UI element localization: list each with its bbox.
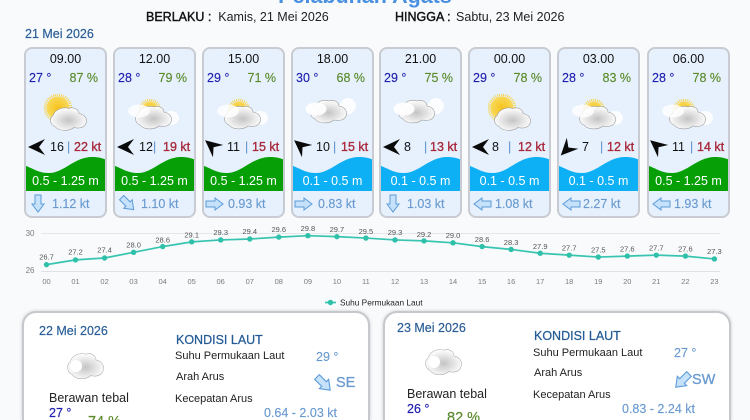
data labels: 29.0 bbox=[446, 231, 460, 240]
temperature: 29 ° bbox=[207, 71, 229, 85]
icon: current arrow bbox=[473, 197, 492, 211]
wave height: 0.1 - 0.5 m bbox=[391, 174, 450, 188]
heading: sea condition: KONDISI LAUT bbox=[534, 329, 621, 343]
legend: Suhu Permukaan Laut bbox=[340, 298, 423, 308]
icon: cloud bbox=[67, 353, 104, 379]
wind speed: 10 bbox=[316, 140, 330, 154]
label: current direction: Arah Arus bbox=[176, 371, 224, 383]
icon: sun and clouds bbox=[217, 98, 268, 130]
x axis labels: 01 bbox=[71, 277, 80, 286]
x axis labels: 18 bbox=[565, 277, 573, 286]
wave height: 0.5 - 1.25 m bbox=[210, 174, 277, 188]
data labels: 29.7 bbox=[330, 225, 344, 234]
value: surface temperature: 29 ° bbox=[316, 350, 338, 364]
data labels: 29.3 bbox=[213, 228, 228, 237]
date heading: 21 Mei 2026 bbox=[25, 27, 94, 41]
humidity: 78 % bbox=[514, 71, 542, 85]
icon: current arrow bbox=[206, 197, 224, 211]
separator: | bbox=[508, 140, 511, 154]
separator: | bbox=[153, 140, 156, 154]
icon: current arrow SE bbox=[314, 374, 331, 391]
data labels: 27.5 bbox=[591, 246, 606, 254]
icon: cloud bbox=[425, 349, 462, 375]
data labels: 27.6 bbox=[678, 244, 693, 254]
panel: forecast 22 Mei 2026 bbox=[22, 311, 370, 420]
label: current direction: Arah Arus bbox=[534, 367, 582, 379]
separator: | bbox=[333, 140, 336, 154]
time: 21.00 bbox=[405, 52, 436, 66]
x axis labels: 04 bbox=[159, 277, 167, 286]
wind gust: 22 kt bbox=[74, 140, 101, 154]
validity: until: HINGGA : Sabtu, 23 Mei 2026 bbox=[395, 10, 564, 24]
wind speed: 12 bbox=[139, 140, 153, 154]
icon: current arrow bbox=[118, 194, 134, 210]
time: 15.00 bbox=[228, 52, 259, 66]
forecast card 09.00 bbox=[24, 47, 107, 218]
current speed: 1.08 kt bbox=[495, 197, 533, 211]
wave height: 0.1 - 0.5 m bbox=[480, 174, 539, 188]
x axis labels: 02 bbox=[100, 277, 109, 286]
icon: current arrow bbox=[652, 197, 670, 211]
weather description: Berawan tebal bbox=[49, 391, 129, 405]
x axis labels: 07 bbox=[246, 277, 254, 286]
wave height band bbox=[204, 157, 283, 191]
wind gust: 12 kt bbox=[607, 140, 634, 154]
date: 22 Mei 2026 bbox=[39, 324, 108, 338]
separator: | bbox=[690, 140, 693, 154]
data labels: 29.6 bbox=[271, 225, 286, 234]
x axis labels: 16 bbox=[507, 277, 515, 286]
icon: wind arrow bbox=[560, 138, 578, 156]
date: 23 Mei 2026 bbox=[397, 321, 466, 335]
wave height band bbox=[293, 157, 372, 191]
wave height: 0.1 - 0.5 m bbox=[569, 174, 628, 188]
value: surface temperature: 27 ° bbox=[674, 346, 696, 360]
current speed: 1.03 kt bbox=[407, 197, 445, 211]
data labels: 27.7 bbox=[649, 244, 664, 252]
wave height: 0.1 - 0.5 m bbox=[303, 174, 362, 188]
temperature: 29 ° bbox=[473, 71, 495, 85]
icon: clouds bbox=[394, 98, 444, 124]
value: current direction: SE bbox=[336, 375, 355, 391]
wind gust: 14 kt bbox=[697, 140, 724, 154]
x axis labels: 08 bbox=[275, 277, 283, 286]
x axis labels: 13 bbox=[420, 277, 428, 286]
wind gust: 15 kt bbox=[252, 140, 279, 154]
current speed: 1.10 kt bbox=[141, 197, 179, 211]
forecast card 15.00 bbox=[202, 47, 285, 218]
icon: wind arrow bbox=[117, 139, 134, 155]
temperature: 27 ° bbox=[49, 406, 71, 420]
icon: sun and clouds bbox=[128, 98, 179, 130]
forecast card 12.00 bbox=[113, 47, 196, 218]
y axis labels: 26 bbox=[26, 266, 35, 275]
icon: current arrow bbox=[386, 194, 400, 213]
humidity: 71 % bbox=[248, 71, 276, 85]
validity: from: BERLAKU : Kamis, 21 Mei 2026 bbox=[146, 10, 329, 24]
data points bbox=[44, 233, 717, 267]
data labels: 29.5 bbox=[359, 227, 373, 236]
x axis labels: 14 bbox=[449, 277, 457, 286]
icon: wind arrow bbox=[472, 139, 489, 155]
forecast card 00.00 bbox=[468, 47, 551, 218]
current speed: 1.93 kt bbox=[674, 197, 712, 211]
x axis labels: 10 bbox=[333, 277, 341, 286]
icon: sun and clouds bbox=[572, 98, 623, 130]
data labels: 28.3 bbox=[504, 238, 518, 247]
data labels: 28.0 bbox=[126, 240, 141, 250]
data labels: 27.7 bbox=[562, 244, 577, 252]
temperature: 28 ° bbox=[652, 71, 674, 85]
icon: wind arrow bbox=[650, 140, 668, 158]
icon: current arrow SW bbox=[675, 370, 692, 388]
current speed: 0.93 kt bbox=[228, 197, 266, 211]
data labels: 27.3 bbox=[707, 247, 722, 256]
x axis labels: 20 bbox=[623, 277, 631, 286]
x axis labels: 11 bbox=[362, 277, 370, 286]
wind speed: 8 bbox=[404, 140, 411, 154]
temperature: 28 ° bbox=[562, 71, 584, 85]
x axis labels: 22 bbox=[681, 277, 690, 286]
wave height band bbox=[26, 157, 105, 191]
x axis labels: 21 bbox=[652, 277, 660, 286]
x axis labels: 03 bbox=[129, 277, 138, 286]
icon: sun and clouds bbox=[662, 98, 713, 130]
wave height: 0.5 - 1.25 m bbox=[121, 174, 188, 188]
data labels: 26.7 bbox=[39, 252, 54, 262]
time: 06.00 bbox=[673, 52, 704, 66]
wind gust: 19 kt bbox=[163, 140, 190, 154]
x axis labels: 23 bbox=[710, 277, 719, 286]
x axis labels: 12 bbox=[391, 277, 399, 286]
separator: | bbox=[245, 140, 248, 154]
y axis labels: 30 bbox=[26, 229, 35, 238]
x axis labels: 15 bbox=[478, 277, 486, 286]
time: 12.00 bbox=[139, 52, 170, 66]
wave height band bbox=[649, 157, 728, 191]
wind gust: 13 kt bbox=[430, 140, 457, 154]
data labels: 27.9 bbox=[533, 242, 548, 251]
wind speed: 7 bbox=[582, 140, 589, 154]
temperature: 26 ° bbox=[407, 402, 429, 416]
separator: | bbox=[424, 140, 427, 154]
wave height: 0.5 - 1.25 m bbox=[655, 174, 722, 188]
line chart: sea surface temperature bbox=[26, 225, 722, 308]
data labels: 29.1 bbox=[184, 230, 199, 240]
value: current speed: 0.64 - 2.03 kt bbox=[264, 406, 337, 420]
temperature line bbox=[46, 236, 714, 265]
humidity: 78 % bbox=[692, 71, 721, 85]
value: current direction: SW bbox=[692, 372, 715, 388]
humidity: 87 % bbox=[70, 71, 98, 85]
wind speed: 8 bbox=[492, 140, 499, 154]
label: surface temperature: Suhu Permukaan Laut bbox=[175, 350, 284, 362]
wave height band bbox=[381, 157, 460, 191]
temperature: 29 ° bbox=[384, 71, 406, 85]
x axis labels bbox=[42, 277, 719, 286]
data labels: 29.2 bbox=[417, 230, 431, 239]
temperature: 27 ° bbox=[29, 71, 51, 85]
icon: wind arrow bbox=[205, 140, 224, 158]
temperature: 30 ° bbox=[296, 71, 318, 85]
x axis labels: 17 bbox=[536, 277, 544, 286]
wind gust: 12 kt bbox=[518, 140, 545, 154]
wind speed: 11 bbox=[672, 140, 685, 154]
label: current speed: Kecepatan Arus bbox=[533, 389, 611, 401]
icon: current arrow bbox=[31, 194, 45, 213]
current speed: 2.27 kt bbox=[583, 197, 621, 211]
icon: current arrow bbox=[562, 197, 580, 211]
icon: sun and cloud bbox=[44, 94, 87, 131]
x axis labels: 19 bbox=[594, 277, 602, 286]
label: current speed: Kecepatan Arus bbox=[175, 393, 253, 405]
panel: forecast 23 Mei 2026 bbox=[383, 311, 731, 420]
icon: clouds bbox=[306, 98, 356, 124]
wind speed: 11 bbox=[227, 140, 240, 154]
data labels: 28.6 bbox=[155, 236, 170, 244]
current speed: 1.12 kt bbox=[52, 197, 90, 211]
humidity: 68 % bbox=[336, 71, 365, 85]
temperature: 28 ° bbox=[118, 71, 140, 85]
data labels: 29.3 bbox=[388, 228, 402, 237]
forecast card 03.00 bbox=[557, 47, 640, 218]
icon: wind arrow bbox=[28, 139, 45, 155]
wave height band bbox=[115, 157, 194, 191]
data labels: 28.6 bbox=[475, 235, 489, 244]
wind speed: 16 bbox=[50, 140, 64, 154]
icon: current arrow bbox=[294, 197, 313, 211]
label: surface temperature: Suhu Permukaan Laut bbox=[533, 347, 642, 359]
separator: | bbox=[67, 140, 70, 154]
data labels: 27.6 bbox=[620, 244, 635, 254]
x axis labels: 06 bbox=[217, 277, 225, 286]
humidity: 83 % bbox=[602, 71, 631, 85]
data labels bbox=[39, 224, 722, 262]
x axis labels: 05 bbox=[188, 277, 196, 286]
data labels: 27.4 bbox=[97, 246, 112, 254]
forecast card 21.00 bbox=[379, 47, 462, 218]
wave height band bbox=[559, 157, 638, 191]
icon: wind arrow bbox=[383, 139, 400, 155]
separator: | bbox=[600, 140, 603, 154]
time: 09.00 bbox=[50, 52, 81, 66]
time: 03.00 bbox=[583, 52, 614, 66]
wave height: 0.5 - 1.25 m bbox=[32, 174, 99, 188]
x axis labels: 00 bbox=[42, 277, 51, 286]
data labels: 29.4 bbox=[242, 227, 257, 236]
icon: sun and cloud bbox=[488, 94, 531, 131]
time: 00.00 bbox=[494, 52, 525, 66]
weather description: Berawan tebal bbox=[407, 387, 487, 401]
forecast card 06.00 bbox=[647, 47, 730, 218]
wave height band bbox=[470, 157, 549, 191]
y axis labels bbox=[26, 229, 35, 275]
icon: wind arrow bbox=[294, 140, 312, 158]
forecast card 18.00 bbox=[291, 47, 374, 218]
x axis labels: 09 bbox=[304, 277, 312, 286]
data labels: 27.2 bbox=[68, 248, 83, 256]
current speed: 0.83 kt bbox=[318, 197, 356, 211]
humidity: 75 % bbox=[424, 71, 453, 85]
heading: sea condition: KONDISI LAUT bbox=[176, 333, 263, 347]
time: 18.00 bbox=[317, 52, 348, 66]
wind gust: 15 kt bbox=[341, 140, 368, 154]
humidity: 79 % bbox=[158, 71, 187, 85]
value: current speed: 0.83 - 2.24 kt bbox=[622, 402, 695, 416]
